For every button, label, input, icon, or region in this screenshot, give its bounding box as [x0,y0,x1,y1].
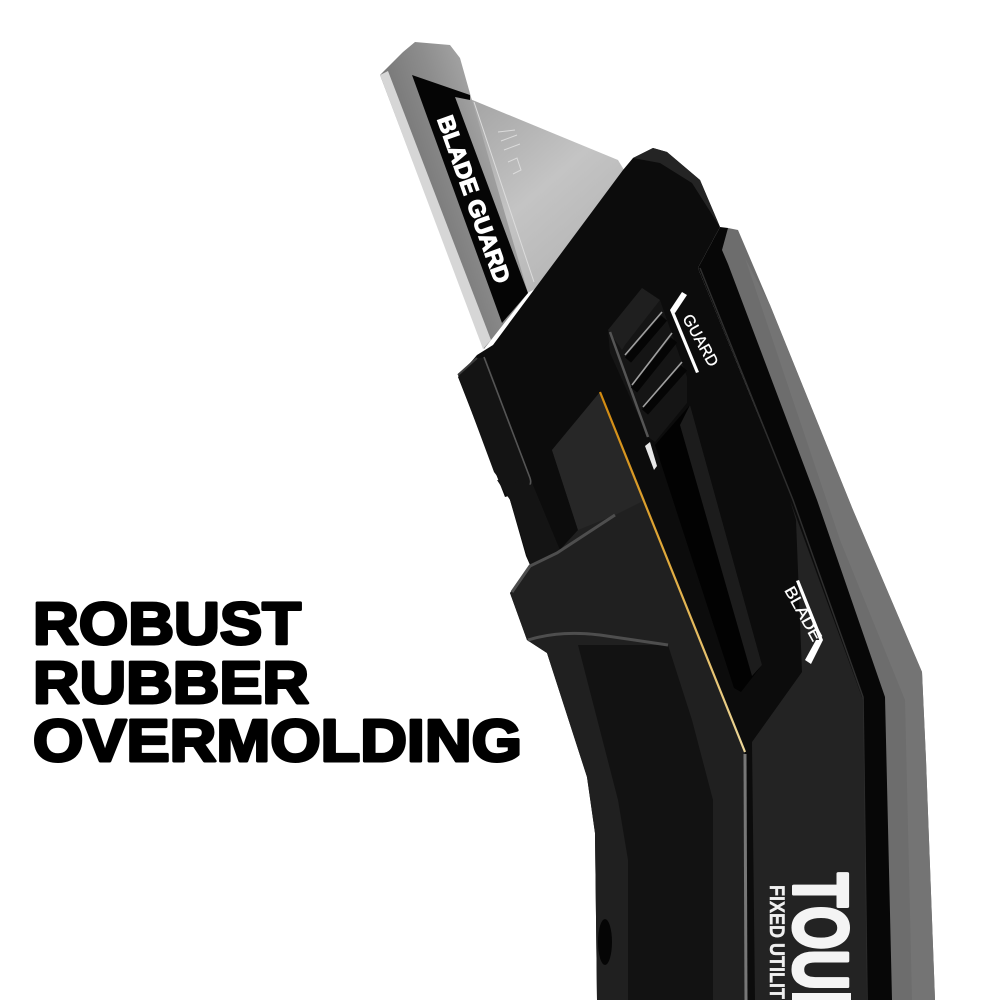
seam between head and strip [700,268,867,1000]
slide slot [655,405,762,692]
black main body [458,148,868,1000]
white sliver [645,442,657,470]
slider thumb [608,288,687,442]
blade logo mark [474,102,534,282]
title: ROBUST [33,591,301,657]
lower light seam [745,754,746,1000]
gold accent line [600,392,745,752]
blade marking [781,580,824,664]
screw [598,919,612,965]
lower neck [497,480,560,565]
head side nub [458,357,533,493]
guard marking [670,292,721,373]
slider ribs [628,318,684,412]
guard arrow band [412,75,528,323]
blade [470,99,624,296]
rubber lit facet [745,258,935,1000]
head top facet [633,148,720,227]
grip central dark area [578,645,713,1000]
guard marking: GUARD [679,312,721,370]
slider bevel [608,288,660,350]
title: RUBBER [33,650,309,716]
gray rubber spine [710,228,935,1000]
blade marking: BLADE [781,584,824,644]
guard label: BLADE GUARD [432,112,516,287]
title: OVERMOLDING [33,708,522,774]
grip ridge highlight [512,515,668,645]
guard bright edge [380,71,491,349]
utility knife product [380,42,935,1000]
blade guard [380,42,528,349]
grip upper facet [552,392,645,530]
slot inner wall [680,405,762,676]
grip body [510,392,745,1000]
dark gray panel [752,500,867,1000]
black strip [698,227,892,1000]
title [33,591,522,774]
